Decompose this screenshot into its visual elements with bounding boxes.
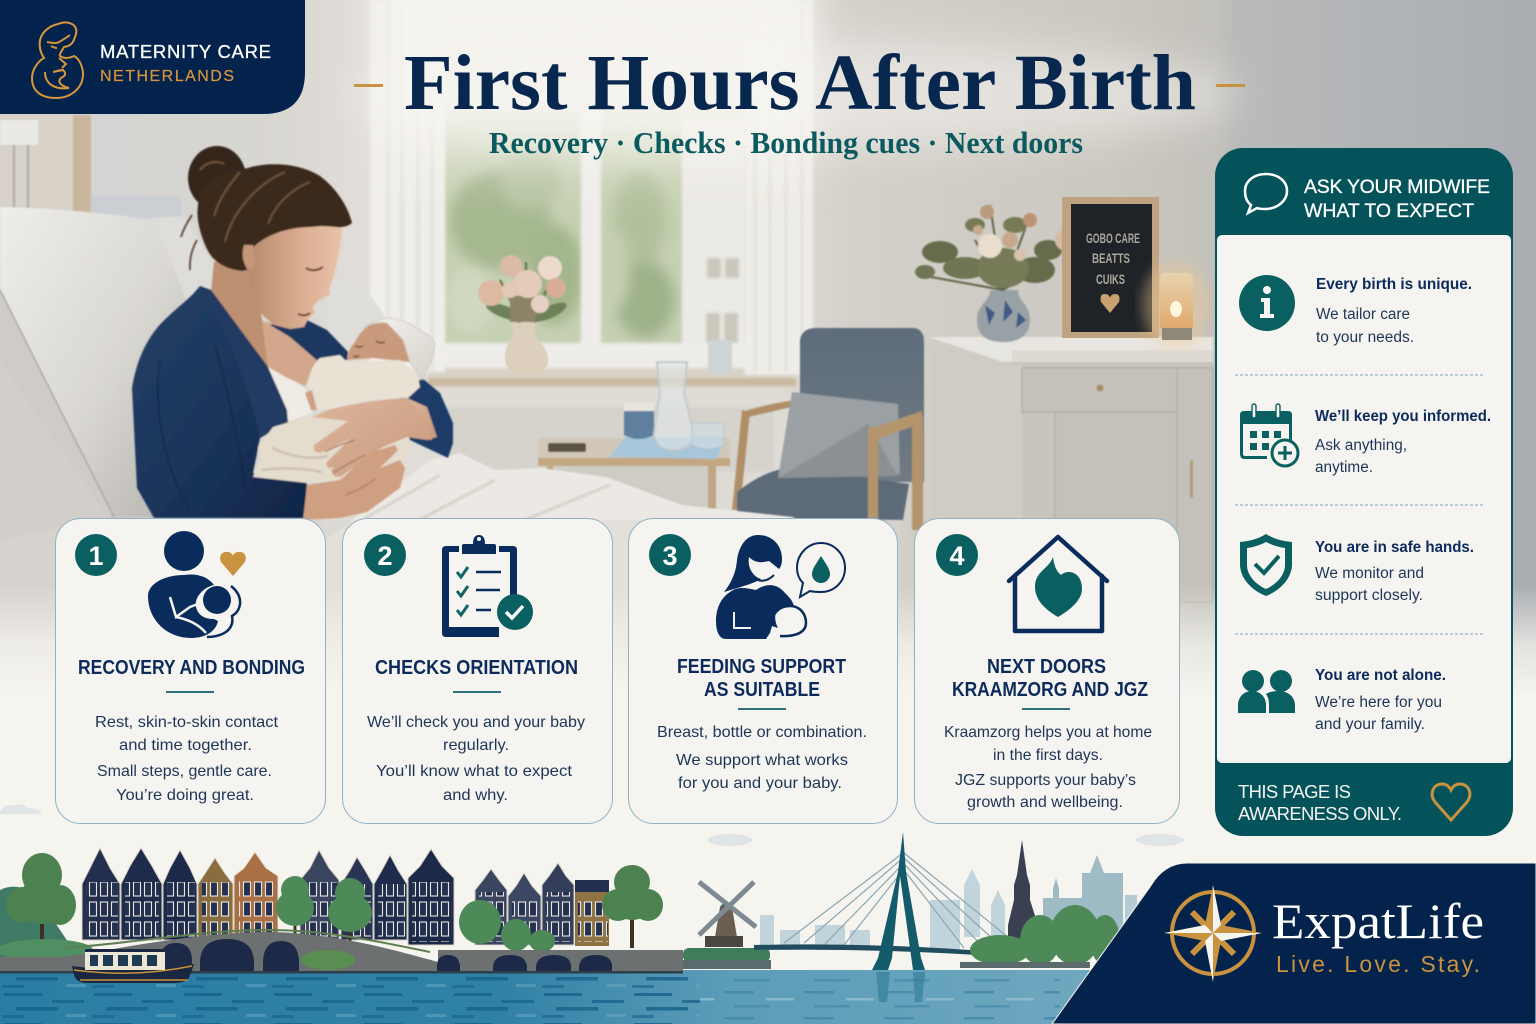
hair and bun bbox=[181, 146, 352, 271]
card heading: AS SUITABLE bbox=[704, 679, 820, 701]
panel: ask your midwife sidebar bbox=[1215, 148, 1513, 836]
icon: parent holding baby with heart bbox=[148, 531, 246, 638]
bouquet in delft blue vase bbox=[915, 205, 1077, 342]
side table with mug and water jug bbox=[538, 362, 730, 512]
sidebar heading: WHAT TO EXPECT bbox=[1304, 200, 1474, 222]
flowers in vase on sill bbox=[478, 255, 569, 375]
card body: We’ll check you and your baby bbox=[367, 714, 585, 731]
lapel and collar bbox=[206, 290, 288, 438]
glowing candle lamp bbox=[1142, 261, 1210, 349]
card body: Kraamzorg helps you at home bbox=[944, 724, 1152, 741]
card heading: KRAAMZORG AND JGZ bbox=[952, 679, 1148, 701]
card body: You’re doing great. bbox=[116, 787, 254, 804]
card body bbox=[657, 724, 867, 792]
wall lamp and bed post bbox=[0, 115, 181, 220]
card body: and time together. bbox=[119, 737, 252, 754]
item: you are not alone: We’re here for you bbox=[1315, 694, 1442, 711]
panel: card 3 feeding support bbox=[628, 518, 898, 824]
card body: in the first days. bbox=[993, 747, 1103, 764]
letter board: BEATTS bbox=[1092, 250, 1130, 266]
title bbox=[354, 40, 1245, 160]
card body: for you and your baby. bbox=[678, 775, 842, 792]
hospital bed with pillows bbox=[0, 207, 900, 690]
water bbox=[0, 970, 1100, 1024]
brand tagline: Live. Love. Stay. bbox=[1276, 951, 1480, 977]
trees bbox=[0, 853, 663, 961]
letter board: CUIKS bbox=[1096, 271, 1125, 287]
church tower bbox=[1008, 840, 1038, 950]
step number 1: 1 bbox=[88, 541, 104, 571]
step number 4 bbox=[936, 534, 978, 576]
subtitle: Recovery · Checks · Bonding cues · Next doors bbox=[489, 125, 1083, 160]
icon: speech bubble bbox=[1245, 174, 1287, 213]
card body bbox=[367, 714, 585, 804]
skyline illustration: Amsterdam canal and Rotterdam bridge bbox=[0, 804, 1184, 1024]
left dash bbox=[354, 84, 383, 87]
white fade to page background bbox=[0, 585, 1536, 695]
card body: Breast, bottle or combination. bbox=[657, 724, 867, 741]
card body: You’ll know what to expect bbox=[376, 763, 573, 780]
card heading: NEXT DOORS bbox=[987, 656, 1106, 678]
panel: card 4 next doors bbox=[914, 518, 1180, 824]
item: you are in safe hands bbox=[1240, 534, 1474, 604]
cabinet bbox=[929, 337, 1213, 605]
icon: information bbox=[1239, 275, 1295, 331]
item: every birth is unique bbox=[1239, 275, 1472, 346]
brand name: ExpatLife bbox=[1272, 893, 1484, 949]
brand region: NETHERLANDS bbox=[100, 68, 234, 85]
sidebar content panel bbox=[1217, 235, 1511, 763]
item: every birth is unique: Every birth is unique. bbox=[1316, 276, 1472, 293]
icon: two people bbox=[1238, 670, 1295, 713]
awareness note bbox=[1238, 781, 1402, 824]
lower swaddle bbox=[253, 415, 412, 483]
item: every birth is unique: to your needs. bbox=[1316, 329, 1414, 346]
heading text: First Hours After Birth bbox=[404, 40, 1196, 127]
card body bbox=[944, 724, 1152, 811]
robe sleeve hidden hand arm bbox=[407, 398, 437, 440]
icon: shield with check bbox=[1240, 534, 1292, 596]
item: you are in safe hands: support closely. bbox=[1315, 587, 1423, 604]
windmill bbox=[683, 882, 771, 969]
canal houses row one bbox=[82, 848, 454, 945]
card body: regularly. bbox=[443, 737, 509, 754]
brand name: MATERNITY CARE bbox=[100, 41, 271, 62]
item: we'll keep you informed: We’ll keep you informed. bbox=[1315, 408, 1491, 425]
card body: Rest, skin-to-skin contact bbox=[95, 714, 279, 731]
step number 2: 2 bbox=[377, 541, 393, 571]
panel: card 1 recovery and bonding bbox=[56, 518, 326, 824]
step number 3 bbox=[649, 534, 691, 576]
card heading bbox=[677, 656, 846, 701]
icon: mother feeding with milk drop bbox=[716, 535, 845, 639]
background trees left bbox=[0, 887, 80, 960]
window top haze bbox=[380, 0, 810, 190]
sheer curtains bbox=[370, 0, 813, 375]
item: we'll keep you informed: anytime. bbox=[1315, 459, 1373, 476]
awareness note: THIS PAGE IS bbox=[1238, 781, 1351, 802]
icon: heart outline bbox=[1432, 784, 1470, 820]
card body: and why. bbox=[443, 787, 508, 804]
stone arch bridge bbox=[0, 930, 683, 974]
hat bbox=[363, 318, 435, 380]
card heading: FEEDING SUPPORT bbox=[677, 656, 846, 678]
sidebar heading bbox=[1304, 176, 1490, 222]
item: we'll keep you informed: Ask anything, bbox=[1315, 437, 1407, 454]
icon: clipboard checklist bbox=[442, 535, 533, 637]
neck and chest bbox=[211, 258, 305, 385]
sidebar heading: ASK YOUR MIDWIFE bbox=[1304, 176, 1490, 198]
icon: house with heart bbox=[1009, 537, 1107, 631]
card body: Small steps, gentle care. bbox=[97, 763, 272, 780]
mother's lower hand bbox=[303, 445, 405, 520]
awareness note: AWARENESS ONLY. bbox=[1238, 803, 1402, 824]
card heading bbox=[952, 656, 1148, 701]
distant skyline bbox=[760, 855, 1137, 950]
panel: card 2 checks orientation bbox=[342, 518, 612, 824]
letter board bbox=[1062, 197, 1159, 338]
icon: mother and child line logo bbox=[32, 22, 83, 98]
baby face bbox=[347, 323, 410, 362]
cable-stayed bridge bbox=[754, 832, 1024, 970]
glass bottle on sill bbox=[708, 340, 732, 375]
item: you are not alone: You are not alone. bbox=[1315, 667, 1446, 684]
armchair bbox=[732, 328, 924, 530]
step number 2 bbox=[364, 534, 406, 576]
item: every birth is unique: We tailor care bbox=[1316, 306, 1410, 323]
step number 4: 4 bbox=[949, 541, 965, 571]
upper swaddle bbox=[307, 355, 420, 410]
card body bbox=[95, 714, 279, 804]
letter board: GOBO CARE bbox=[1086, 230, 1140, 246]
white top bbox=[268, 367, 312, 422]
footer panel: ExpatLife logo bbox=[1052, 863, 1536, 1024]
card body: JGZ supports your baby’s bbox=[955, 772, 1136, 789]
pylon reflections bbox=[876, 972, 925, 1002]
card heading: RECOVERY AND BONDING bbox=[78, 657, 305, 679]
icon: calendar with plus bbox=[1240, 404, 1298, 466]
step number 1 bbox=[75, 534, 117, 576]
top-left brand badge bbox=[0, 0, 305, 114]
card body: growth and wellbeing. bbox=[967, 794, 1123, 811]
navy robe bbox=[132, 286, 307, 518]
waterfront trees bbox=[960, 905, 1120, 968]
window with garden view bbox=[428, 110, 796, 472]
card body: We support what works bbox=[676, 752, 848, 769]
icon: compass rose bbox=[1164, 885, 1262, 982]
mother holding newborn bbox=[132, 146, 453, 520]
item: you are in safe hands: We monitor and bbox=[1315, 565, 1424, 582]
canal boat bbox=[72, 949, 194, 983]
face bbox=[248, 226, 343, 329]
item: we'll keep you informed bbox=[1240, 404, 1491, 476]
mother's top hand with fingers bbox=[312, 398, 432, 477]
step number 3: 3 bbox=[662, 541, 678, 571]
item: you are not alone bbox=[1238, 667, 1446, 733]
card heading: CHECKS ORIENTATION bbox=[375, 657, 578, 679]
right dash bbox=[1216, 84, 1245, 87]
clouds bbox=[0, 804, 1184, 846]
item: you are not alone: and your family. bbox=[1315, 716, 1425, 733]
item: you are in safe hands: You are in safe hands. bbox=[1315, 539, 1474, 556]
canal houses row two bbox=[475, 863, 609, 946]
